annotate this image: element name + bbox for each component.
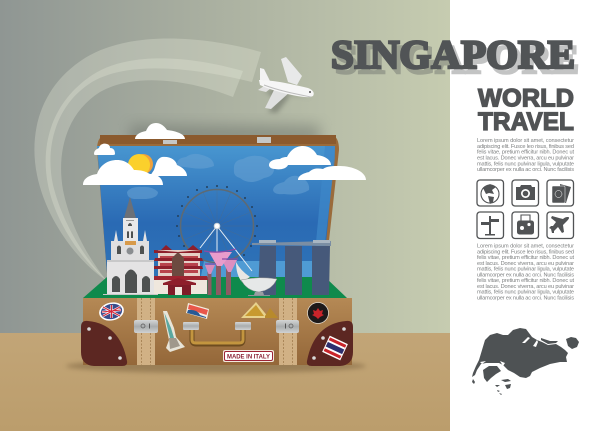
suitcase ground shadow xyxy=(66,359,366,373)
suitcase body xyxy=(81,298,353,366)
floor xyxy=(0,333,450,431)
lorem text block bottom: felis vitae, pretium efficitur nibh. Donec ut xyxy=(477,255,574,261)
suitcase interior green floor xyxy=(83,277,347,298)
lorem text block bottom: est lacus. Donec viverra, arcu eu pulvinar xyxy=(477,261,574,267)
heading: world travel: WORLD xyxy=(478,84,574,112)
sun xyxy=(128,154,153,176)
lorem text block bottom: ullamcorper ex nulla ac orci. Nunc facilisis xyxy=(477,272,574,278)
right leather corner xyxy=(307,321,353,366)
lorem text block bottom: est lacus. Donec viverra, arcu eu pulvinar xyxy=(477,284,574,290)
lorem text block top: ullamcorper ex nulla ac orci. Nunc facilisis xyxy=(477,167,574,173)
sticker: made in italy: MADE IN ITALY xyxy=(227,354,271,360)
lorem text block bottom: ullamcorper ex nulla ac orci. Nunc facilisis xyxy=(477,295,574,301)
lorem text block bottom: adipiscing elit. Fusce leo risus, finibus sed xyxy=(477,249,574,255)
lorem text block top: Lorem ipsum dolor sit amet, consectetur xyxy=(477,138,574,144)
sticker: made in italy xyxy=(223,350,274,362)
sticker: maple leaf badge xyxy=(308,302,328,324)
cloud: upper right xyxy=(269,146,331,169)
sticker: Thai flag xyxy=(322,336,348,360)
faint sky clouds xyxy=(127,154,309,199)
right lock xyxy=(276,320,299,333)
buddha tooth relic temple xyxy=(146,245,208,295)
map coastal inlets xyxy=(480,337,538,366)
icon: passports xyxy=(547,180,574,206)
lid soft shadow xyxy=(130,125,320,145)
cloud: behind sun xyxy=(150,157,187,176)
water horizon xyxy=(200,261,324,281)
title: Singapore with drop shadow: SINGAPORE xyxy=(331,32,575,77)
lorem text block bottom: mattis, felis nunc pulvinar ligula, vulputate xyxy=(477,266,574,272)
airplane xyxy=(258,57,316,113)
lid latch right xyxy=(257,137,271,143)
cloud: small top left xyxy=(94,144,115,155)
white side panel xyxy=(450,0,600,431)
lorem text block bottom: felis vitae, pretium efficitur nibh. Donec ut xyxy=(477,278,574,284)
sticker: statue of liberty xyxy=(163,311,185,352)
icon: globe xyxy=(477,180,504,206)
lorem text block top xyxy=(477,138,574,173)
flight trail swoosh xyxy=(34,38,261,281)
heading: world travel xyxy=(478,84,574,136)
lorem text block top: adipiscing elit. Fusce leo risus, finibus sed xyxy=(477,144,574,150)
lorem text block bottom xyxy=(477,244,574,301)
map of Singapore xyxy=(472,328,579,395)
cloud: lower right xyxy=(298,166,366,180)
sticker: pyramids xyxy=(241,302,278,318)
lorem text block bottom: mattis, felis nunc pulvinar ligula, vulputate xyxy=(477,290,574,296)
sticker: UK flag xyxy=(97,300,126,323)
gardens by the bay supertrees xyxy=(204,249,238,295)
lorem text block bottom: Lorem ipsum dolor sit amet, consectetur xyxy=(477,244,574,250)
left strap xyxy=(137,298,155,365)
lorem text block top: mattis, felis nunc pulvinar ligula, vulputate xyxy=(477,161,574,167)
icon: luggage xyxy=(512,212,538,238)
left lock xyxy=(134,320,158,333)
church xyxy=(103,197,158,295)
heading: world travel: TRAVEL xyxy=(478,108,574,136)
right strap xyxy=(279,298,297,365)
lorem text block top: felis vitae, pretium efficitur nibh. Donec ut xyxy=(477,150,574,156)
handle xyxy=(183,322,251,344)
icon: airplane xyxy=(547,212,574,238)
title: Singapore with drop shadow: SINGAPORE xyxy=(335,37,579,82)
wall background xyxy=(0,0,450,333)
artscience museum xyxy=(236,262,277,296)
lorem text block top: est lacus. Donec viverra, arcu eu pulvinar xyxy=(477,156,574,162)
left leather corner xyxy=(81,321,127,366)
cloud: big left xyxy=(83,160,163,185)
lid latch left xyxy=(163,140,177,144)
ferris wheel xyxy=(176,185,258,271)
sticker: rising sun flag xyxy=(186,303,209,319)
suitcase lid xyxy=(97,135,339,286)
cloud: top of lid xyxy=(135,123,185,139)
icon: camera xyxy=(512,180,538,206)
marina bay sands xyxy=(252,240,331,295)
icon: signpost xyxy=(477,212,504,238)
